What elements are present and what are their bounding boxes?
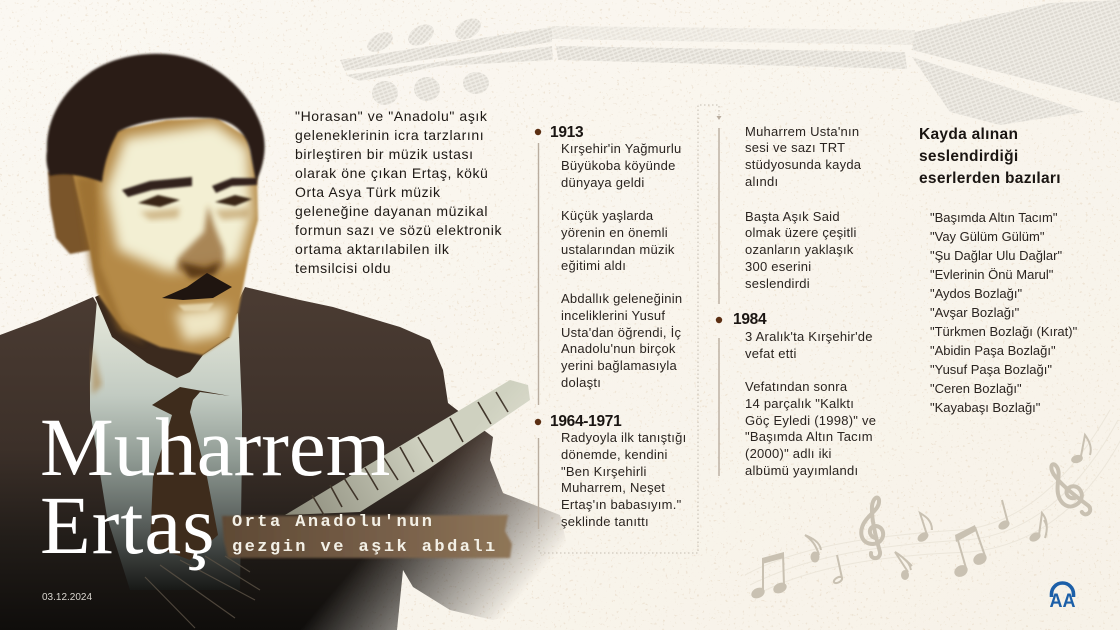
abdal tradition: Usta'dan öğrendi, İç	[561, 325, 681, 340]
albums	[745, 379, 876, 478]
list of works: "Aydos Bozlağı"	[930, 286, 1022, 301]
list of works: "Başımda Altın Tacım"	[930, 210, 1058, 224]
list of works: "Ceren Bozlağı"	[930, 381, 1022, 396]
shirt	[90, 300, 242, 590]
intro text: ortama aktarılabilen ilk	[295, 241, 449, 257]
list of works: "Kayabaşı Bozlağı"	[930, 400, 1040, 415]
timeline: 1913	[550, 124, 682, 390]
albums: "Başımda Altın Tacım	[745, 429, 873, 444]
albums: Göç Eyledi (1998)" ve	[745, 413, 876, 428]
portrait of Muharrem Ertaş with saz	[0, 54, 580, 630]
timeline: 1984	[733, 311, 876, 478]
side shading	[76, 176, 146, 345]
list of works: "Evlerinin Önü Marul"	[930, 267, 1053, 282]
list of works	[930, 210, 1077, 415]
300 works text	[745, 209, 857, 291]
intro text	[295, 108, 502, 276]
radio: dönemde, kendini	[561, 447, 668, 462]
year 1984: 1984	[733, 311, 766, 328]
intro text: Orta Asya Türk müzik	[295, 184, 441, 200]
saz strings below band	[145, 556, 260, 628]
list of works: "Avşar Bozlağı"	[930, 305, 1019, 320]
list of works: "Türkmen Bozlağı (Kırat)"	[930, 324, 1077, 339]
saz silhouette at the top	[340, 0, 1120, 125]
intro text: geleneğine dayanan müzikal	[295, 203, 488, 219]
suit	[0, 287, 580, 630]
death: vefat etti	[745, 346, 797, 361]
face base	[72, 118, 258, 355]
TRT text: alındı	[745, 174, 778, 189]
abdal tradition: yerini bağlamasıyla	[561, 358, 677, 373]
chin highlight	[175, 305, 228, 342]
title: Muharrem	[40, 401, 390, 493]
radio: Radyoyla ilk tanıştığı	[561, 430, 686, 445]
saz neck	[285, 380, 530, 515]
radio: "Ben Kırşehirli	[561, 464, 647, 479]
albums: albümü yayımlandı	[745, 463, 858, 478]
year 1913: 1913	[550, 124, 583, 140]
tie	[150, 387, 230, 560]
intro text: olarak öne çıkan Ertaş, kökü	[295, 165, 488, 181]
list of works: "Abidin Paşa Bozlağı"	[930, 343, 1056, 358]
TRT text	[745, 124, 861, 189]
abdal tradition: dolaştı	[561, 375, 601, 390]
abdal tradition	[561, 291, 682, 390]
birth: dünyaya geldi	[561, 175, 644, 190]
face light	[106, 124, 252, 272]
eyebrows	[122, 177, 192, 197]
heading	[919, 126, 1061, 187]
intro text: "Horasan" ve "Anadolu" aşık	[295, 108, 488, 124]
AA logo: AA	[1050, 591, 1076, 612]
subtitle	[232, 512, 498, 556]
ear	[48, 168, 92, 254]
TRT text: stüdyosunda kayda	[745, 157, 861, 172]
radio	[561, 430, 686, 529]
timeline: 1964-1971	[550, 413, 686, 529]
heading: Kayda alınan	[919, 126, 1018, 143]
subtitle band	[222, 515, 512, 558]
timeline connectors	[535, 105, 722, 553]
albums: (2000)" adlı iki	[745, 446, 832, 461]
radio: şeklinde tanıttı	[561, 514, 649, 529]
panel: recorded works	[919, 126, 1077, 415]
heading: eserlerden bazıları	[919, 170, 1061, 187]
300 works text: ozanların yaklaşık	[745, 242, 854, 257]
eyes	[138, 195, 180, 207]
education: Küçük yaşlarda	[561, 208, 653, 223]
list of works: "Yusuf Paşa Bozlağı"	[930, 362, 1052, 377]
birth	[561, 141, 681, 190]
title	[40, 401, 390, 571]
list of works: "Şu Dağlar Ulu Dağlar"	[930, 248, 1062, 263]
hair	[46, 54, 265, 182]
300 works text: 300 eserini	[745, 259, 811, 274]
lower lip	[178, 303, 214, 311]
heading: seslendirdiği	[919, 148, 1019, 165]
education	[561, 208, 675, 273]
collar stain	[92, 345, 102, 395]
albums: Vefatından sonra	[745, 379, 847, 394]
300 works text: Başta Aşık Said	[745, 209, 840, 224]
albums: 14 parçalık "Kalktı	[745, 396, 854, 411]
TRT text: Muharrem Usta'nın	[745, 124, 859, 139]
subtitle: gezgin ve aşık abdalı	[232, 538, 498, 556]
year 1964-1971: 1964-1971	[550, 413, 621, 430]
list of works: "Vay Gülüm Gülüm"	[930, 229, 1044, 244]
intro text: geleneklerinin icra tarzlarını	[295, 127, 484, 143]
subtitle: Orta Anadolu'nun	[232, 512, 434, 532]
education: ustalarından müzik	[561, 242, 675, 257]
radio: Ertaş'ın babasıyım."	[561, 497, 681, 512]
300 works text: seslendirdi	[745, 276, 810, 291]
nose	[176, 205, 224, 278]
education: yörenin en önemli	[561, 225, 668, 240]
abdal tradition: Anadolu'nun birçok	[561, 341, 676, 356]
TRT text: sesi ve sazı TRT	[745, 140, 845, 155]
intro text: birleştiren bir müzik ustası	[295, 146, 474, 162]
neck shadow	[95, 290, 230, 378]
abdal tradition: inceliklerini Yusuf	[561, 308, 665, 323]
timeline: TRT recordings	[745, 124, 861, 291]
music notes and staff	[745, 410, 1120, 600]
300 works text: olmak üzere çeşitli	[745, 225, 857, 240]
birth: Kırşehir'in Yağmurlu	[561, 141, 681, 156]
death	[745, 329, 873, 361]
education: eğitimi aldı	[561, 258, 626, 273]
title: Ertaş	[40, 479, 216, 571]
mustache	[162, 273, 232, 300]
death: 3 Aralık'ta Kırşehir'de	[745, 329, 873, 344]
abdal tradition: Abdallık geleneğinin	[561, 291, 682, 306]
radio: Muharrem, Neşet	[561, 480, 665, 495]
date: 03.12.2024	[42, 592, 92, 603]
birth: Büyükoba köyünde	[561, 158, 676, 173]
intro text: temsilcisi oldu	[295, 260, 391, 276]
intro text: formun sazı ve sözü elektronik	[295, 222, 502, 238]
